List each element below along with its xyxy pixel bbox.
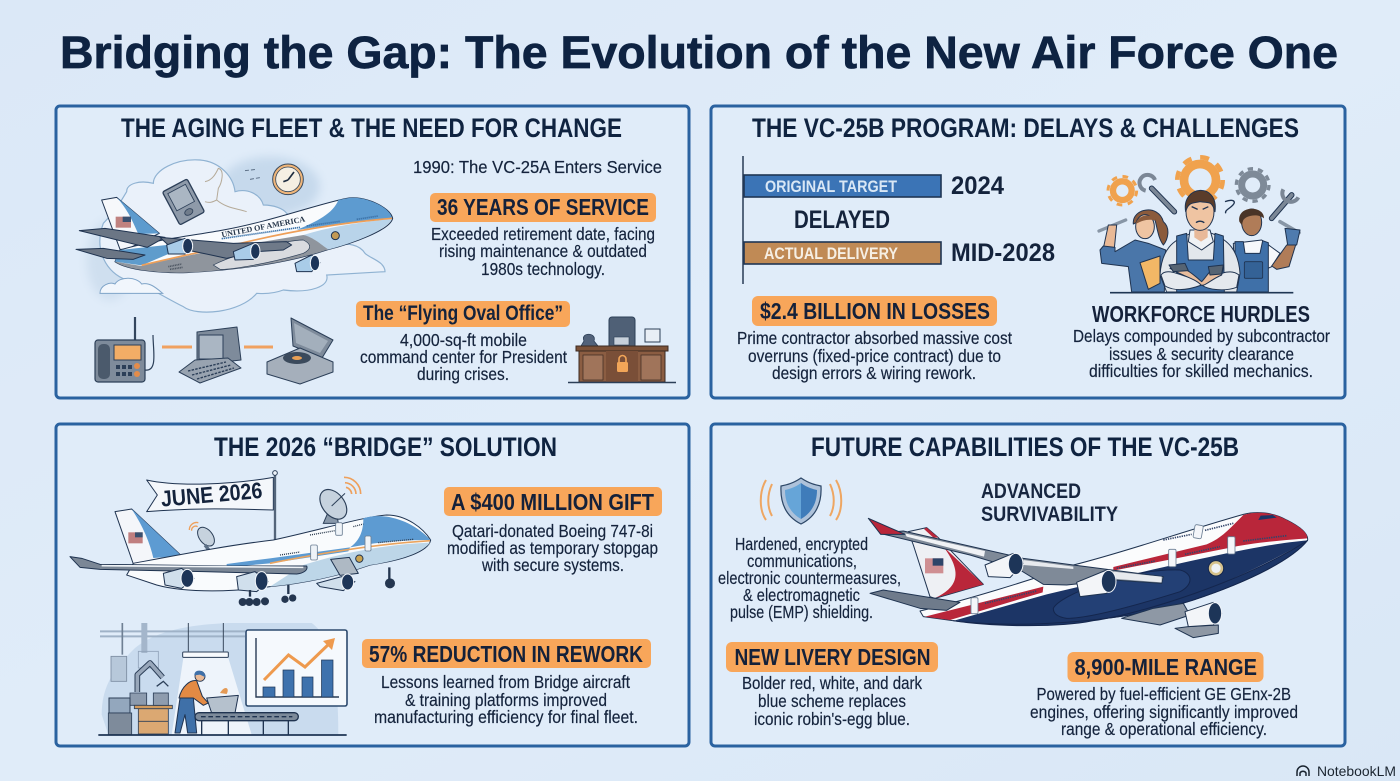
chart: schedule timeline: MID-2028 (951, 239, 1055, 267)
text: gift details: modified as temporary stopgap (447, 538, 658, 558)
text: command center details (360, 330, 567, 384)
text: rework details (374, 672, 638, 727)
callout: 400 million gift: A $400 MILLION GIFT (451, 489, 655, 515)
figure: lead mechanic (1160, 190, 1240, 292)
text: survivability details: communications, (747, 551, 857, 571)
text: gift details: Qatari-donated Boeing 747-8i (452, 521, 653, 541)
panel: bridge solution (56, 424, 689, 746)
text: retirement details: 1980s technology. (481, 259, 605, 279)
heading: advanced survivability: SURVIVABILITY (981, 503, 1118, 526)
text: retirement details (431, 224, 655, 279)
connector: orange dashes (162, 346, 273, 348)
callout: 57 percent reduction: 57% REDUCTION IN REWORK (369, 641, 643, 667)
text: cost overrun details: Prime contractor absorbed massive cost (737, 328, 1012, 348)
text: workforce details: issues & security clearance (1109, 344, 1294, 364)
text: range details: range & operational efficiency. (1061, 719, 1267, 739)
aircraft: UNITED OF AMERICA (221, 214, 306, 239)
aircraft (76, 197, 393, 273)
banner: june 2026 (147, 471, 277, 541)
callout: 8900 mile range: 8,900-MILE RANGE (1074, 654, 1257, 680)
text: livery details: blue scheme replaces (758, 691, 906, 711)
text: survivability details (718, 534, 901, 622)
robot arm (130, 663, 168, 705)
panel: VC-25B program (711, 106, 1345, 398)
text: command center details: 4,000-sq-ft mobile (400, 330, 527, 350)
heading: future capabilities: FUTURE CAPABILITIES OF THE VC-25B (811, 432, 1239, 462)
callout: flying oval office: The “Flying Oval Office” (363, 302, 563, 325)
text: gift details: with secure systems. (481, 555, 624, 575)
chart: schedule timeline: 2024 (951, 172, 1004, 200)
illustration: workforce team (1099, 157, 1300, 293)
text: livery details: iconic robin's-egg blue. (754, 709, 910, 729)
text: survivability details: electronic countermeasures, (718, 568, 901, 588)
icon: clock (273, 164, 303, 195)
figure: woman mechanic (1099, 210, 1168, 292)
text: livery details (742, 673, 922, 729)
text: survivability details: pulse (EMP) shielding. (730, 602, 873, 622)
chart: schedule timeline: ACTUAL DELIVERY (764, 244, 899, 263)
text: command center details: during crises. (417, 364, 509, 384)
icon: secure desk (568, 317, 676, 382)
banner: june 2026: JUNE 2026 (160, 477, 263, 512)
heading: workforce hurdles: WORKFORCE HURDLES (1092, 301, 1310, 327)
text: range details: engines, offering significantly improved (1030, 702, 1298, 722)
text: retirement details: rising maintenance & outdated (439, 241, 647, 261)
worker (175, 671, 238, 733)
illustration: bridge aircraft with banner (70, 471, 431, 606)
icon: gears (1108, 157, 1298, 218)
heading: VC-25B program: THE VC-25B PROGRAM: DELAYS & CHALLENGES (752, 113, 1299, 143)
text: survivability details: & electromagnetic (743, 585, 860, 605)
text: range details: Powered by fuel-efficient GE GEnx-2B (1036, 684, 1291, 704)
text: cost overrun details: design errors & wiring rework. (772, 363, 976, 383)
chart: schedule timeline: DELAYED (794, 206, 890, 234)
text: workforce details: Delays compounded by subcontractor (1073, 326, 1330, 346)
chart: schedule timeline (743, 156, 1055, 284)
icon: radio telephone (95, 317, 154, 382)
clouds (87, 157, 385, 312)
text: workforce details: difficulties for skilled mechanics. (1089, 361, 1313, 381)
text: rework details: Lessons learned from Bridge aircraft (381, 672, 630, 692)
heading: advanced survivability: ADVANCED (981, 480, 1081, 503)
text: retirement details: Exceeded retirement date, facing (431, 224, 655, 244)
wing (868, 518, 1163, 585)
heading: advanced survivability (981, 480, 1118, 526)
icon: tablet (162, 179, 205, 225)
text: livery details: Bolder red, white, and dark (742, 673, 922, 693)
text: cost overrun details: overruns (fixed-price contract) due to (748, 346, 1001, 366)
title: Bridging the Gap: The Evolution of the New Air Force One (60, 27, 1338, 78)
logo: NotebookLM: NotebookLM (1317, 763, 1396, 779)
chart: rework reduction (246, 630, 347, 706)
panel: aging fleet (56, 106, 689, 398)
text: command center details: command center for President (360, 347, 567, 367)
text: 1990 entry: 1990: The VC-25A Enters Service (413, 157, 662, 177)
illustration: VC-25B aircraft (868, 513, 1308, 638)
tail fin (908, 528, 983, 598)
icon: record player (267, 318, 333, 384)
text: workforce details (1073, 326, 1330, 381)
icon: vintage computer (179, 327, 241, 383)
callout: 36 years of service: 36 YEARS OF SERVICE (437, 194, 649, 220)
text: range details (1030, 684, 1298, 739)
panel: future capabilities (711, 424, 1345, 746)
illustration: factory floor (98, 623, 347, 735)
icon: satellite dishes (189, 477, 361, 552)
chart: schedule timeline: ORIGINAL TARGET (765, 177, 898, 196)
text: gift details (447, 521, 658, 575)
text: cost overrun details (737, 328, 1012, 383)
text: rework details: manufacturing efficiency for final fleet. (374, 707, 638, 727)
figure: man with overalls (1233, 209, 1300, 292)
fuselage (920, 513, 1308, 624)
heading: bridge solution: THE 2026 “BRIDGE” SOLUTION (214, 432, 557, 462)
icon: shield with signal waves (761, 478, 841, 524)
text: survivability details: Hardened, encrypted (735, 534, 868, 554)
heading: aging fleet: THE AGING FLEET & THE NEED FOR CHANGE (121, 113, 622, 143)
illustration: aging aircraft in clouds (76, 157, 393, 312)
callout: 2.4 billion losses: $2.4 BILLION IN LOSSES (760, 298, 990, 324)
text: rework details: & training platforms improved (405, 690, 607, 710)
callout: new livery design: NEW LIVERY DESIGN (734, 644, 930, 670)
